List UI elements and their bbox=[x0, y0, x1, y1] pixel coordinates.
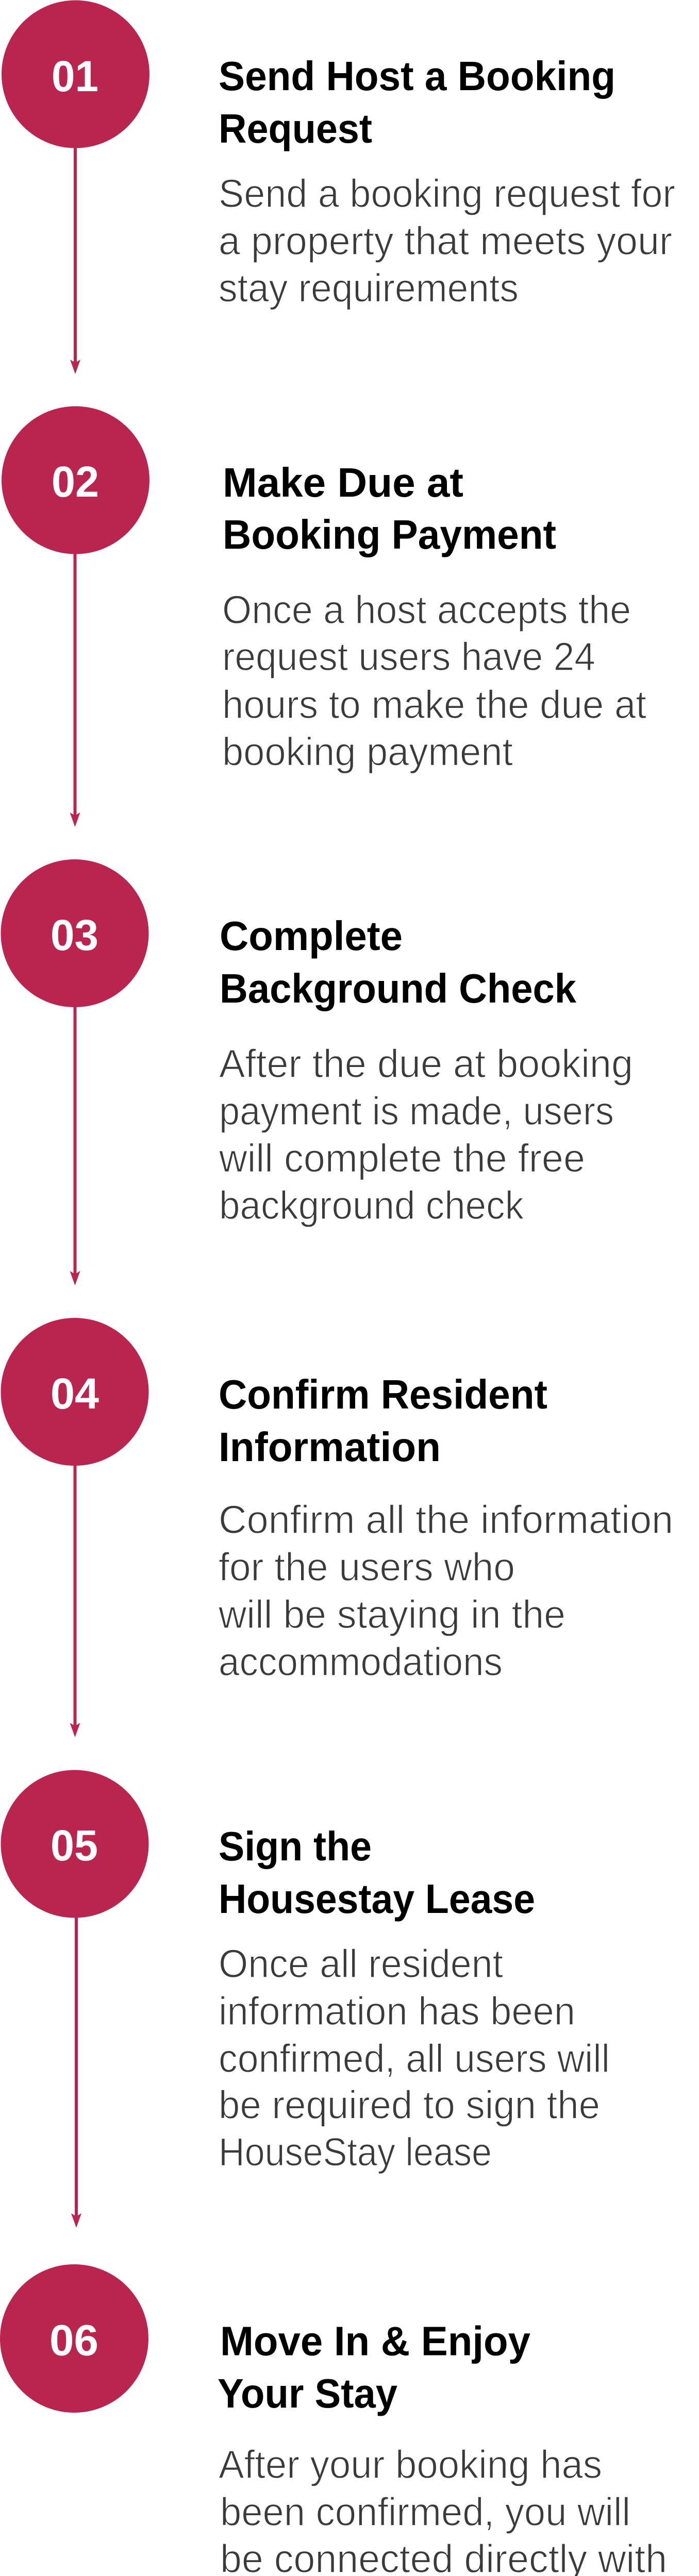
number circle 01 bbox=[2, 0, 149, 148]
body text 6 bbox=[219, 2443, 667, 2576]
body text 5: Once all resident bbox=[219, 1942, 503, 1986]
heading 3: Complete bbox=[220, 913, 403, 959]
body text 3: payment is made, users bbox=[219, 1089, 614, 1133]
body text 4: will be staying in the bbox=[218, 1592, 565, 1637]
body text 6: been confirmed, you will bbox=[220, 2490, 630, 2534]
step 2: make due at booking payment bbox=[2, 406, 646, 827]
body text 1: Send a booking request for bbox=[219, 172, 675, 216]
heading 1: Send Host a Booking bbox=[219, 53, 615, 99]
step number 02: 02 bbox=[52, 457, 99, 506]
number circle 03 bbox=[1, 859, 148, 1007]
step 5: sign the housestay lease bbox=[1, 1770, 610, 2228]
arrow 4 bbox=[70, 1465, 80, 1737]
arrow 3 bbox=[70, 1007, 80, 1285]
step 4: confirm resident information bbox=[1, 1318, 673, 1737]
step 6: move in and enjoy your stay bbox=[0, 2264, 667, 2576]
body text 1 bbox=[219, 172, 675, 310]
heading 4: Information bbox=[219, 1424, 441, 1470]
heading 5 bbox=[219, 1823, 535, 1922]
body text 5: information has been bbox=[219, 1989, 575, 2033]
heading 4 bbox=[219, 1371, 547, 1470]
number circle 02 bbox=[2, 406, 149, 554]
heading 5: Housestay Lease bbox=[219, 1876, 535, 1922]
body text 1: stay requirements bbox=[219, 266, 519, 310]
body text 2: request users have 24 bbox=[222, 635, 595, 679]
body text 4: accommodations bbox=[219, 1640, 503, 1684]
body text 3 bbox=[219, 1042, 633, 1228]
number circle 06 bbox=[0, 2264, 148, 2413]
step number 01: 01 bbox=[52, 52, 98, 100]
heading 2: Booking Payment bbox=[223, 512, 556, 557]
body text 5 bbox=[219, 1942, 610, 2174]
heading 6: Your Stay bbox=[218, 2370, 397, 2416]
heading 6: Move In & Enjoy bbox=[220, 2318, 530, 2364]
arrow 1 bbox=[70, 147, 80, 374]
body text 1: a property that meets your bbox=[219, 219, 672, 263]
step number 05: 05 bbox=[51, 1821, 98, 1870]
number circle 04 bbox=[1, 1318, 148, 1466]
step 1: send host a booking request bbox=[2, 0, 675, 374]
body text 4: Confirm all the information bbox=[219, 1498, 673, 1542]
body text 2: hours to make the due at bbox=[222, 683, 646, 727]
heading 6 bbox=[218, 2318, 530, 2416]
body text 2 bbox=[222, 588, 646, 774]
body text 2: booking payment bbox=[222, 730, 513, 774]
arrow 2 bbox=[70, 553, 80, 827]
body text 5: confirmed, all users will bbox=[219, 2037, 610, 2081]
body text 6: After your booking has bbox=[219, 2443, 602, 2487]
heading 2: Make Due at bbox=[223, 460, 463, 505]
heading 5: Sign the bbox=[219, 1823, 372, 1869]
body text 3: After the due at booking bbox=[219, 1042, 633, 1086]
body text 5: be required to sign the bbox=[219, 2083, 600, 2127]
heading 2 bbox=[223, 460, 556, 557]
heading 4: Confirm Resident bbox=[219, 1371, 547, 1417]
body text 4 bbox=[218, 1498, 673, 1684]
body text 2: Once a host accepts the bbox=[222, 588, 631, 632]
step number 04: 04 bbox=[51, 1369, 99, 1418]
heading 3 bbox=[220, 913, 576, 1011]
step 3: complete background check bbox=[1, 859, 633, 1285]
arrow 5 bbox=[71, 1917, 81, 2228]
step number 03: 03 bbox=[51, 911, 98, 959]
number circle 05 bbox=[1, 1770, 148, 1918]
body text 5: HouseStay lease bbox=[219, 2130, 492, 2174]
heading 1 bbox=[219, 53, 615, 151]
body text 4: for the users who bbox=[219, 1545, 515, 1589]
heading 3: Background Check bbox=[220, 965, 576, 1011]
body text 3: background check bbox=[219, 1183, 524, 1228]
step number 06: 06 bbox=[49, 2316, 98, 2365]
heading 1: Request bbox=[219, 106, 372, 151]
body text 3: will complete the free bbox=[219, 1137, 585, 1181]
